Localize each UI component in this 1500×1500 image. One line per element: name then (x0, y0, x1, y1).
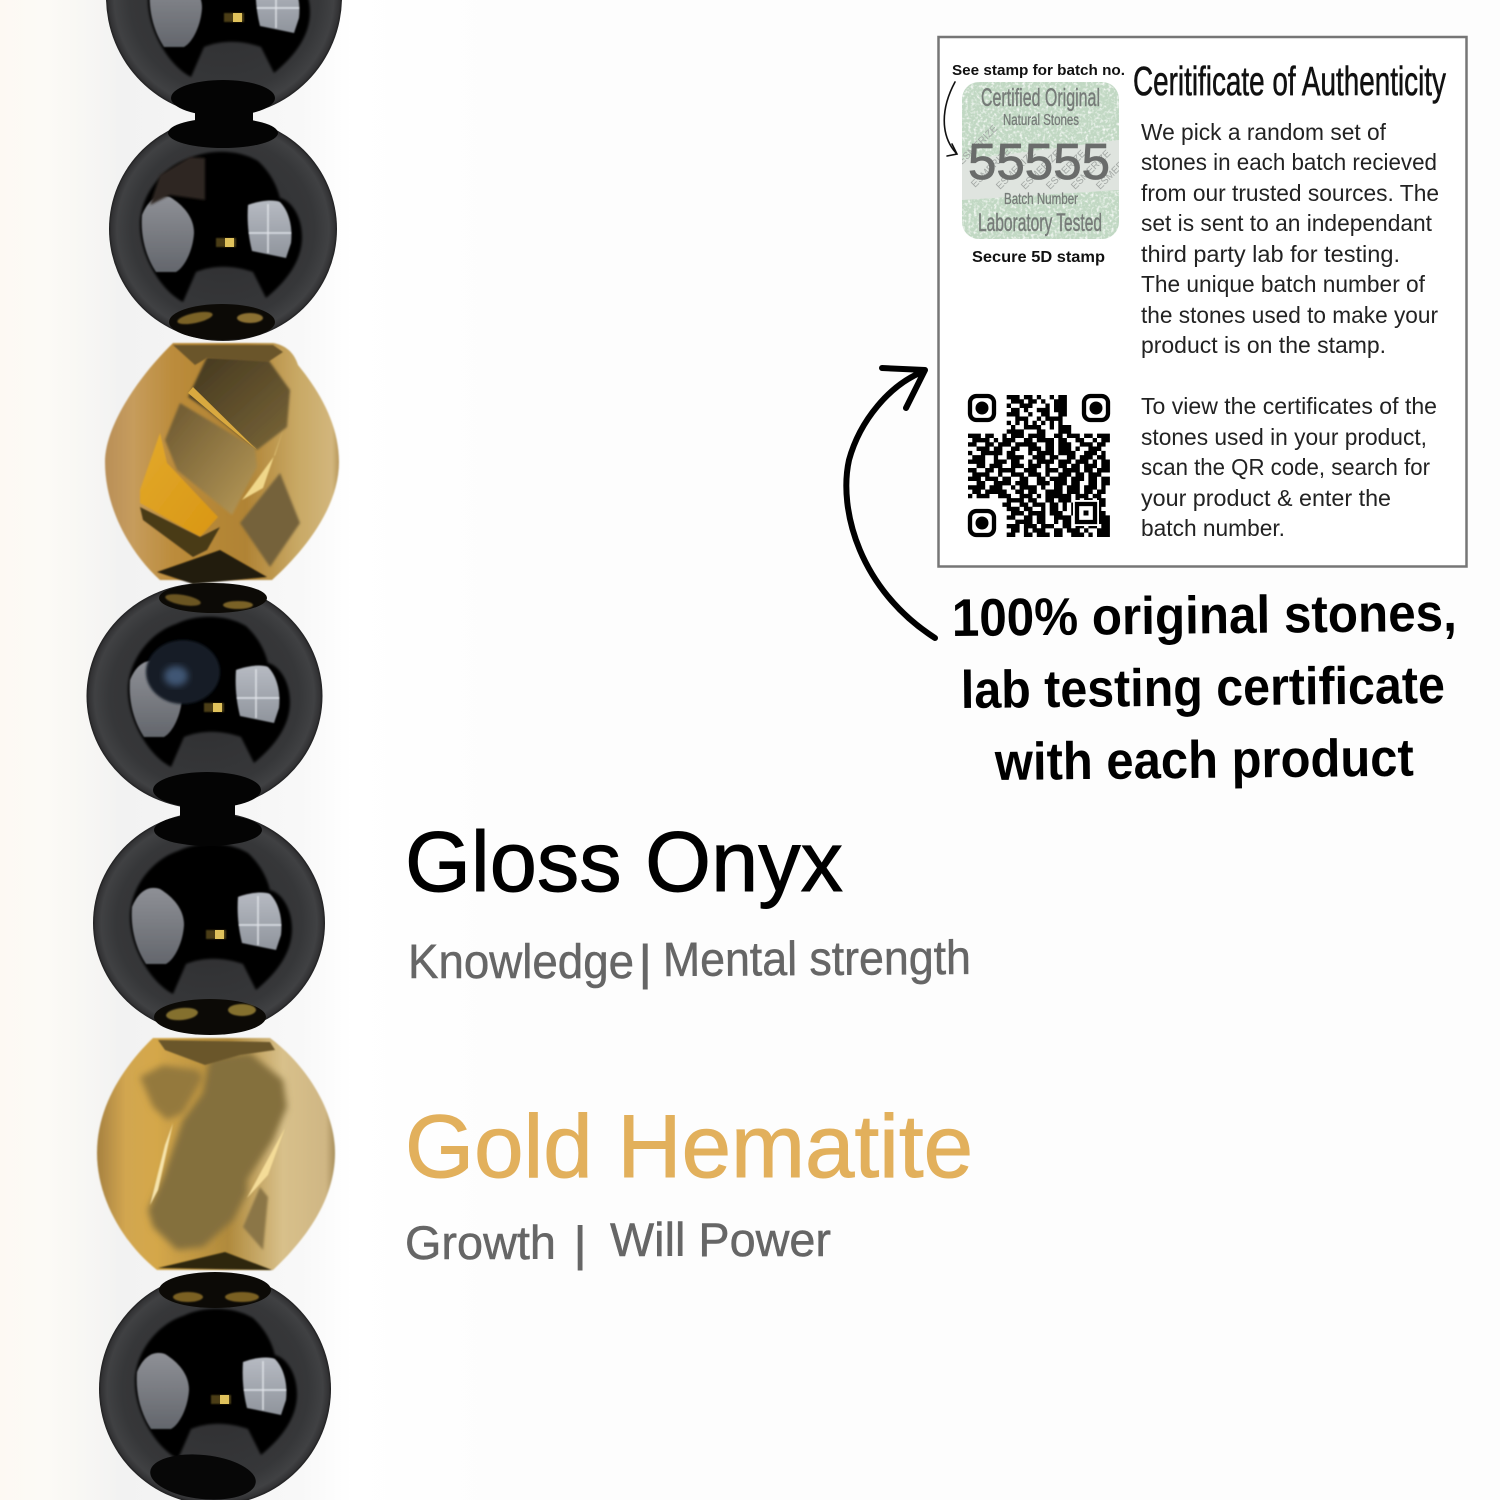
certificate body text: the stones used to make your (1141, 302, 1438, 328)
certificate body text (1141, 119, 1439, 358)
stamp text: natural stones: Natural Stones (1003, 112, 1079, 129)
stamp band with microtext: ESMERIZE (969, 146, 1014, 190)
certificate body text: third party lab for testing. (1141, 241, 1400, 267)
stamp batch number: 55555 (968, 133, 1110, 190)
stamp band with microtext: ESMERIZE (1044, 148, 1089, 192)
onyx bead 1 (106, 0, 342, 116)
panel: certificate card (938, 37, 1466, 566)
certificate body text: set is sent to an independant (1141, 210, 1432, 236)
gold hematite bead 2 (97, 1038, 335, 1270)
text: hematite properties: Will Power (610, 1213, 831, 1266)
callout: original stones: with each product (994, 729, 1414, 792)
certificate body text: stones in each batch recieved (1141, 149, 1437, 175)
stamp band with microtext: ESMERIZE (1019, 148, 1064, 192)
icon: small curved arrow to stamp (944, 82, 957, 156)
stamp band with microtext: ESMERIZE (1069, 148, 1114, 192)
stamp band with microtext (962, 82, 1119, 239)
bead strand (86, 0, 342, 1500)
QR finder patterns (970, 396, 1108, 535)
card frame (938, 37, 1466, 566)
text: onyx properties: Mental strength (663, 932, 971, 987)
stamp caption: secure 5D stamp: Secure 5D stamp (972, 249, 1105, 266)
onyx bead 3 (86, 583, 322, 809)
QR instructions text: batch number. (1141, 515, 1285, 541)
onyx bead 4 (93, 812, 325, 1034)
QR modules (968, 397, 1110, 535)
stamp text: batch number: Batch Number (1004, 191, 1078, 208)
certificate body text: We pick a random set of (1141, 119, 1386, 145)
stamp caption: see stamp: See stamp for batch no. (952, 63, 1125, 79)
stamp band with microtext: ESMERIZE (1094, 148, 1139, 192)
QR instructions text: stones used in your product, (1141, 424, 1427, 450)
callout: original stones (952, 584, 1457, 792)
text: hematite properties: Growth (405, 1216, 556, 1269)
arrow: curved arrow to certificate (846, 368, 935, 638)
QR instructions text: your product & enter the (1141, 485, 1391, 511)
certificate body text: product is on the stamp. (1141, 332, 1386, 358)
text: hematite properties (405, 1213, 831, 1270)
text: onyx properties (408, 932, 971, 990)
text: hematite properties: | (574, 1217, 586, 1270)
secure holographic stamp (962, 82, 1119, 239)
text: onyx properties: | (639, 937, 651, 990)
onyx bead 5 (99, 1273, 331, 1500)
spacer beads (148, 80, 278, 1500)
QR instructions text: To view the certificates of the (1141, 393, 1437, 419)
heading: Gloss Onyx: Gloss Onyx (405, 815, 843, 910)
heading: Gold Hematite: Gold Hematite (405, 1096, 973, 1196)
stamp text: laboratory tested: Laboratory Tested (978, 209, 1102, 237)
stamp band with microtext: ESMERIZE (956, 123, 1001, 167)
certificate body text: from our trusted sources. The (1141, 180, 1439, 206)
QR instructions text (1141, 393, 1437, 541)
QR code (968, 396, 1110, 535)
gold hematite bead 1 (105, 343, 339, 584)
callout: original stones: 100% original stones, (952, 584, 1457, 648)
certificate body text: The unique batch number of (1141, 271, 1425, 297)
callout: original stones: lab testing certificate (961, 656, 1445, 720)
QR instructions text: scan the QR code, search for (1141, 454, 1430, 480)
stamp text: certified original: Certified Original (981, 84, 1100, 112)
onyx bead 2 (109, 117, 337, 341)
stamp band with microtext: ESMERIZE (994, 148, 1039, 192)
QR alignment pattern (1073, 500, 1099, 526)
text: onyx properties: Knowledge (408, 936, 634, 989)
